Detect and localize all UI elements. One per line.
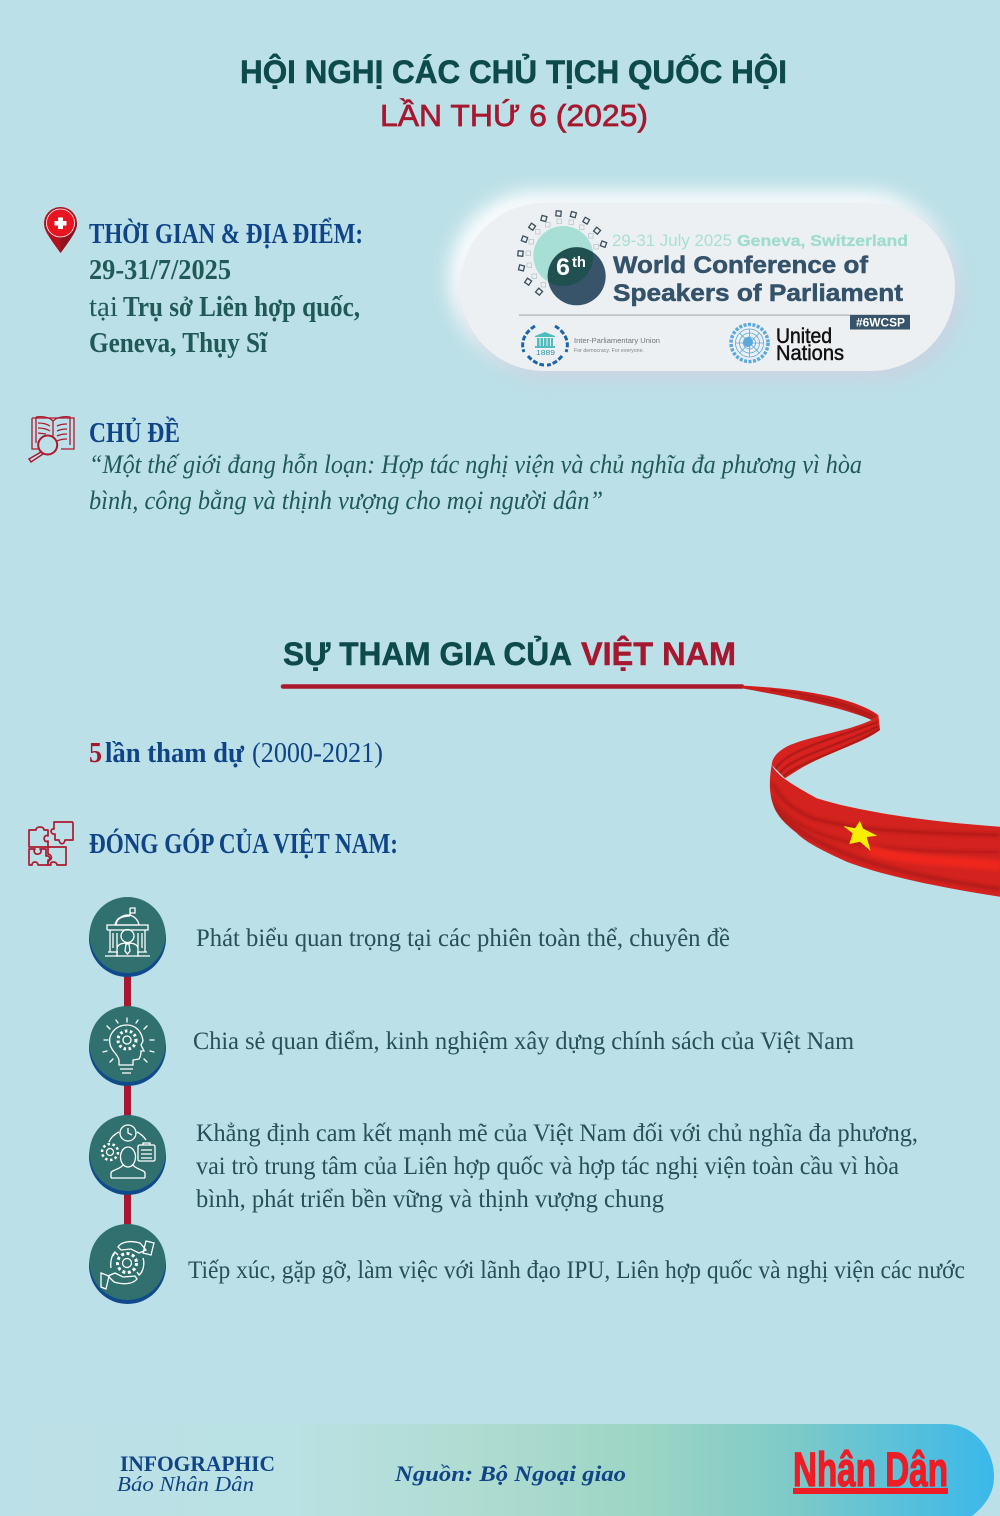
- icon: parliament building with person: [89, 897, 166, 977]
- logo: Inter-Parliamentary Union: [523, 326, 660, 365]
- list item 1: [89, 897, 730, 977]
- icon: puzzle pieces: [29, 822, 73, 865]
- item text: Chia sẻ quan điểm, kinh nghiệm xây dựng chính sách của Việt Nam: [193, 1028, 855, 1055]
- timeline connectors: [124, 970, 131, 1230]
- text block: time and venue: tại: [89, 292, 118, 323]
- text block: time and venue: Geneva, Thụy Sĩ: [89, 328, 268, 359]
- item text: [196, 1120, 918, 1213]
- list item 3: [89, 1115, 918, 1213]
- text: number of attendances: 5: [89, 738, 102, 769]
- text block: theme: “Một thế giới đang hỗn loạn: Hợp tác nghị viện và chủ nghĩa đa phương vì hòa: [89, 449, 862, 479]
- item text: vai trò trung tâm của Liên hợp quốc và hợp tác nghị viện toàn cầu vì hòa: [196, 1153, 899, 1180]
- icon: conference emblem: [518, 211, 607, 305]
- text block: time and venue: Trụ sở Liên hợp quốc,: [123, 292, 360, 323]
- heading underline: [283, 684, 742, 689]
- hashtag tag: #6WCSP: [856, 318, 905, 330]
- conference date and place: [612, 231, 908, 250]
- hashtag tag: [850, 315, 910, 330]
- logo: United Nations: United: [776, 325, 832, 348]
- logo: United Nations: Nations: [776, 342, 844, 365]
- conference name: Speakers of Parliament: [613, 280, 903, 307]
- conference name: [613, 252, 903, 307]
- icon: open book with magnifier: [29, 417, 74, 462]
- footer band: [0, 1424, 994, 1516]
- footer credit: [117, 1451, 275, 1496]
- footer source: Nguồn: Bộ Ngoại giao: [394, 1461, 626, 1486]
- item text: bình, phát triển bền vững và thịnh vượng chung: [196, 1186, 664, 1213]
- section heading: Vietnam's participation: [283, 636, 736, 672]
- footer credit: INFOGRAPHIC: [120, 1451, 275, 1476]
- icon: location pin with Swiss cross: [44, 207, 77, 253]
- text block: time and venue: [89, 218, 363, 359]
- conference name: World Conference of: [613, 252, 869, 279]
- item text: Khẳng định cam kết mạnh mẽ của Việt Nam đối với chủ nghĩa đa phương,: [196, 1120, 918, 1147]
- logo: United Nations: [731, 324, 844, 365]
- item text: Tiếp xúc, gặp gỡ, làm việc với lãnh đạo IPU, Liên hợp quốc và nghị viện các nước: [188, 1257, 965, 1284]
- icon: person with gear, clock and clipboard: [89, 1115, 166, 1195]
- item text: Phát biểu quan trọng tại các phiên toàn thể, chuyên đề: [196, 925, 730, 952]
- heading: Vietnam's contributions: ĐÓNG GÓP CỦA VIỆT NAM:: [89, 829, 398, 860]
- icon: conference emblem: 6: [556, 254, 570, 281]
- text: number of attendances: [89, 738, 383, 769]
- icon: yellow star: [843, 821, 877, 851]
- text block: theme: [89, 417, 862, 515]
- conference logo panel: [450, 192, 961, 379]
- icon: conference emblem: th: [572, 254, 586, 271]
- list item 2: [89, 1006, 855, 1086]
- text: number of attendances: (2000-2021): [252, 738, 383, 769]
- conference date and place: 29-31 July 2025: [612, 231, 732, 250]
- text: number of attendances: lần tham dự: [105, 738, 245, 769]
- conference date and place: Geneva, Switzerland: [737, 233, 908, 250]
- section heading: Vietnam's participation: SỰ THAM GIA CỦA: [283, 636, 572, 672]
- flag ribbon: [740, 686, 1000, 897]
- section heading: Vietnam's participation: VIỆT NAM: [581, 636, 736, 672]
- list item 4: [89, 1224, 965, 1304]
- text block: time and venue: THỜI GIAN & ĐỊA ĐIỂM:: [89, 218, 363, 250]
- title: HỘI NGHỊ CÁC CHỦ TỊCH QUỐC HỘI: [240, 54, 787, 90]
- footer credit: Báo Nhân Dân: [117, 1472, 254, 1496]
- logo: Inter-Parliamentary Union: Inter-Parliamentary Union: [574, 336, 660, 345]
- icon: hands around gear: [89, 1224, 166, 1304]
- text block: theme: bình, công bằng và thịnh vượng cho mọi người dân”: [89, 485, 603, 515]
- text block: time and venue: 29-31/7/2025: [89, 255, 231, 286]
- logo: Inter-Parliamentary Union: 1889: [536, 348, 555, 357]
- title: [240, 54, 787, 133]
- title: LẦN THỨ 6 (2025): [380, 98, 648, 133]
- icon: light bulb with gear: [89, 1006, 166, 1086]
- logo: Inter-Parliamentary Union: For democracy. For everyone.: [574, 348, 644, 354]
- text block: theme: CHỦ ĐỀ: [89, 417, 180, 449]
